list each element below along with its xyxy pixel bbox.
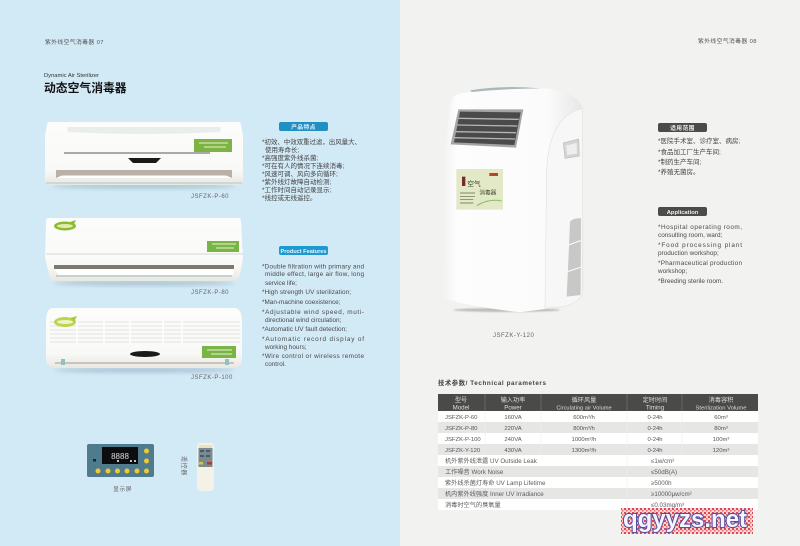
text block: English features: *Man-machine coexistence; [262, 299, 341, 306]
text block: English application: consulting room, ward; [658, 232, 723, 239]
table: technical parameters: 定时时间 [643, 396, 667, 404]
label: display screen: 显示屏 [113, 486, 132, 493]
badge: Product Features: Product Features [280, 249, 327, 255]
panel: right page background [400, 0, 800, 546]
table: technical parameters: 60m³ [714, 415, 728, 421]
text block: English features [262, 264, 364, 368]
text block: Chinese features: *工作时间自动记录显示; [262, 185, 332, 194]
table: technical parameters: 160VA [504, 415, 522, 421]
text block: Chinese features: *线控或无线遥控。 [262, 193, 317, 202]
table: technical parameters: 机内紫外线强度 Inner UV Irradiance [445, 490, 544, 498]
table: technical parameters: Circulating air Volume [556, 406, 612, 412]
text block: English application: production workshop; [658, 250, 719, 257]
text block: English features: *Automatic UV fault detection; [262, 326, 347, 333]
text block: Chinese application: *食品加工厂生产车间; [658, 147, 721, 156]
text block: English application: *Pharmaceutical production [658, 260, 742, 267]
text block: Chinese features: *可在有人的情况下连续消毒; [262, 161, 345, 170]
table: technical parameters: Model [453, 404, 469, 412]
panel: left page background [0, 0, 400, 546]
product: JSFZK-Y-120 portable unit: 空气 [467, 179, 481, 188]
table: technical parameters: 0-24h [647, 415, 663, 421]
icon: remote control [197, 443, 214, 491]
label: JSFZK-Y-120: JSFZK-Y-120 [493, 333, 534, 339]
text block: English application: workshop; [657, 268, 687, 275]
table: technical parameters: ≤0.03mg/m³ [651, 502, 684, 509]
text block: English features: *Wire control or wireless remote [262, 353, 364, 360]
table: technical parameters: 0-24h [647, 426, 663, 432]
heading: technical parameters: 技术参数/ Technical parameters [438, 378, 547, 387]
subtitle: Dynamic Air Sterilizer [44, 73, 99, 79]
label: JSFZK-P-80: JSFZK-P-80 [191, 290, 229, 296]
table: technical parameters: Sterilization Volume [696, 406, 746, 412]
text block: English features: *High strength UV sterilization; [262, 289, 351, 296]
text block: Chinese application: *制药生产车间; [658, 157, 702, 166]
table: technical parameters: 0-24h [647, 437, 663, 443]
text block: English features: *Automatic record display of [262, 336, 364, 343]
text block: English application: *Hospital operating room, [658, 224, 742, 231]
text block: Chinese features [262, 137, 361, 202]
table: technical parameters: ≥5000h [651, 480, 672, 487]
label: remote vertical: 遥控器 [180, 456, 188, 476]
table: technical parameters: 800m³/h [573, 426, 595, 432]
text block: English features: working hours; [264, 344, 307, 351]
table: technical parameters: 紫外线杀菌灯寿命 UV Lamp Lifetime [445, 479, 546, 487]
text block: Chinese features: *高强度紫外线杀菌; [262, 153, 319, 162]
table: technical parameters: 0-24h [647, 448, 663, 454]
badge: application Chinese: 适用范围 [670, 124, 695, 132]
table: technical parameters: 100m³ [713, 437, 729, 443]
table: technical parameters: ≤50dB(A) [651, 469, 677, 476]
table: technical parameters: 600m³/h [573, 415, 595, 421]
table: technical parameters: 120m³ [713, 448, 729, 454]
table: technical parameters: ≤1w/cm² [651, 458, 674, 465]
table: technical parameters: 1300m³/h [572, 448, 596, 454]
text block: English features: service life; [265, 280, 297, 287]
text block: English features: *Double filtration with primary and [262, 264, 364, 270]
text block: English application: *Food processing plant [658, 242, 742, 249]
table: technical parameters: JSFZK-P-80 [445, 426, 478, 432]
table: technical parameters: 型号 [455, 396, 467, 404]
product: JSFZK-P-80 wall unit [45, 218, 243, 286]
text block: English features: *Adjustable wind speed, muti- [262, 309, 364, 316]
table: technical parameters: JSFZK-P-100 [445, 437, 481, 443]
text block: Chinese features: *紫外线灯故障自动检测; [262, 177, 332, 186]
table: technical parameters: 消毒容积 [709, 396, 733, 404]
table: technical parameters: Timing [646, 404, 665, 412]
badge: Application [658, 207, 707, 216]
text block: English application: *Breeding sterile room. [658, 278, 723, 285]
product: JSFZK-Y-120 portable unit [440, 87, 583, 312]
page header right: 紫外线空气消毒器 08 [698, 37, 757, 45]
text block: English features: middle effect, large air flow, long [265, 271, 364, 278]
product: JSFZK-Y-120 portable unit: 消毒器 [479, 188, 497, 196]
table: technical parameters: 80m³ [714, 426, 728, 432]
badge: application Chinese [658, 123, 707, 132]
icon: display panel [87, 444, 154, 477]
table: technical parameters: 消毒时空气的臭氧量 [445, 501, 501, 509]
watermark: qgyyzs.net: qgyyzs.net [623, 506, 747, 533]
text block: Chinese application: *养殖无菌房。 [658, 167, 700, 176]
table: technical parameters [438, 394, 758, 510]
table: technical parameters: 输入功率 [501, 396, 525, 404]
table: technical parameters: JSFZK-P-60 [445, 415, 478, 421]
text block: Chinese features: *风速可调、风向多向循环; [262, 169, 338, 178]
label: JSFZK-P-60: JSFZK-P-60 [191, 194, 229, 200]
table: technical parameters: 220VA [504, 426, 522, 432]
badge: Product Features [279, 246, 328, 255]
icon: display panel: 8888 [111, 452, 129, 461]
table: technical parameters: 工作噪音 Work Noise [445, 468, 504, 476]
product: JSFZK-P-60 wall unit [45, 122, 243, 188]
text block: English application [657, 224, 742, 285]
badge: Application: Application [667, 210, 699, 216]
table: technical parameters: 240VA [504, 437, 522, 443]
table: technical parameters: 循环风量 [572, 396, 596, 404]
text block: English features: control. [265, 361, 286, 368]
table: technical parameters: JSFZK-Y-120 [445, 448, 481, 454]
table: technical parameters: ≥10000μw/cm² [651, 491, 692, 498]
text block: Chinese application [658, 136, 741, 176]
badge: product features Chinese [279, 122, 328, 131]
text block: Chinese features: 使用寿命长; [265, 145, 300, 154]
page header left: 紫外线空气消毒器 07 [45, 38, 104, 46]
title: 动态空气消毒器 [44, 81, 127, 95]
badge: product features Chinese: 产品特点 [291, 123, 316, 131]
label: JSFZK-P-100: JSFZK-P-100 [191, 375, 233, 381]
text block: Chinese features: *初效、中效双重过滤，出风量大、 [262, 137, 361, 146]
text block: English features: directional wind circulation; [265, 317, 342, 324]
table: technical parameters: 1000m³/h [572, 437, 596, 443]
table: technical parameters: Power [504, 404, 522, 412]
product: JSFZK-P-100 wall unit [46, 308, 242, 372]
text block: Chinese application: *医院手术室、诊疗室、病房; [658, 136, 741, 145]
table: technical parameters: 430VA [504, 448, 522, 454]
table: technical parameters: 机外紫外线泄露 UV Outside Leak [445, 457, 538, 465]
